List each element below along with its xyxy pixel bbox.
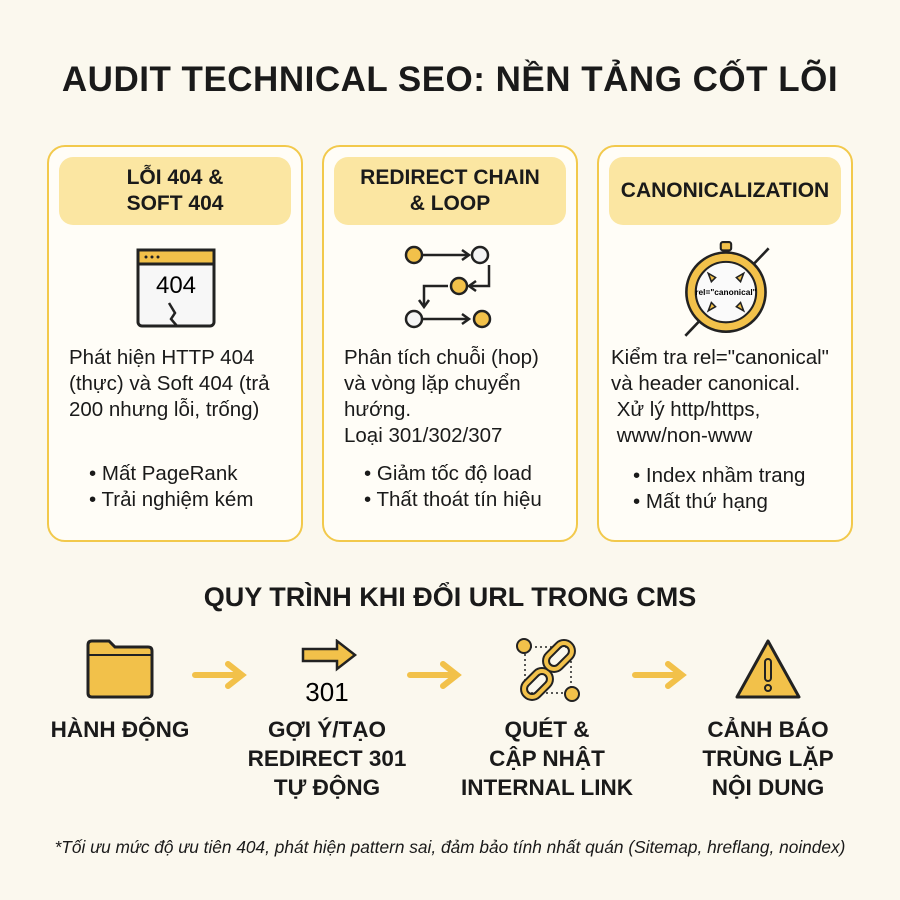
bullets: redirect (364, 462, 542, 511)
step: duplicate warning (702, 639, 834, 800)
footnote: *Tối ưu mức độ ưu tiên 404, phát hiện pattern sai, đảm bảo tính nhất quán (Sitemap, hreflang, noindex) (55, 837, 845, 857)
label: redirect 301: TỰ ĐỘNG (274, 775, 380, 800)
icon: canonical target: rel="canonical" (695, 287, 757, 297)
bullets: 404: • Mất PageRank (89, 462, 237, 485)
label: redirect 301 (248, 717, 406, 800)
heading: redirect (334, 157, 566, 225)
heading: 404 (59, 157, 291, 225)
bullets: canonical: • Index nhầm trang (633, 464, 805, 487)
bullets: 404 (89, 462, 253, 511)
heading: redirect: & LOOP (410, 192, 490, 215)
step: internal links (461, 638, 633, 800)
panel: redirect (322, 145, 578, 542)
text: canonical description: Kiểm tra rel="canonical" và header canonical. (611, 346, 829, 395)
icon: warning triangle (736, 639, 801, 698)
panel: 404 (47, 145, 303, 542)
label: redirect 301: REDIRECT 301 (248, 746, 406, 771)
heading: canonical: CANONICALIZATION (621, 179, 829, 202)
text: 404 description: Phát hiện HTTP 404 (thực) và Soft 404 (trả 200 nhưng lỗi, trống) (69, 346, 270, 421)
arrow 1 (192, 661, 247, 689)
section heading: QUY TRÌNH KHI ĐỔI URL TRONG CMS (204, 582, 696, 612)
bullets: canonical: • Mất thứ hạng (633, 490, 768, 513)
icon: folder (86, 640, 154, 698)
title: AUDIT TECHNICAL SEO: NỀN TẢNG CỐT LÕI (62, 60, 838, 99)
heading: 404: LỖI 404 & (127, 166, 223, 189)
text: redirect description: Phân tích chuỗi (hop) và vòng lặp chuyển hướng. (344, 346, 539, 421)
text: canonical description: www/non-www (617, 424, 752, 447)
heading: redirect: REDIRECT CHAIN (360, 166, 540, 189)
step: redirect 301 (248, 639, 406, 800)
bullets: 404: • Trải nghiệm kém (89, 488, 253, 511)
icon: canonical target (684, 241, 770, 337)
step: action (51, 640, 189, 742)
label: duplicate warning (702, 717, 834, 800)
icon: 301 arrow (302, 639, 357, 705)
icon: redirect chain (404, 246, 492, 328)
icon: 404 browser (136, 248, 216, 328)
bullets: canonical (633, 464, 805, 513)
label: action: HÀNH ĐỘNG (51, 717, 189, 742)
label: internal links: CẬP NHẬT (489, 746, 605, 771)
bullets: redirect: • Giảm tốc độ load (364, 462, 532, 485)
arrow 2 (407, 661, 462, 689)
text: canonical description (611, 346, 829, 447)
label: redirect 301: GỢI Ý/TẠO (268, 717, 386, 742)
icon: 404 browser: 404 (156, 272, 196, 299)
heading: canonical (609, 157, 841, 225)
bullets: redirect: • Thất thoát tín hiệu (364, 488, 542, 511)
heading: 404: SOFT 404 (127, 192, 223, 215)
label: duplicate warning: TRÙNG LẶP (702, 746, 834, 771)
label: internal links (461, 717, 633, 800)
icon: chain link (516, 638, 580, 702)
arrow 3 (632, 661, 687, 689)
panel: canonical (597, 145, 853, 542)
label: duplicate warning: CẢNH BÁO (707, 717, 829, 742)
text: redirect description: Loại 301/302/307 (344, 424, 502, 447)
label: internal links: QUÉT & (504, 717, 590, 742)
label: internal links: INTERNAL LINK (461, 775, 633, 800)
label: duplicate warning: NỘI DUNG (712, 775, 824, 800)
text: canonical description: Xử lý http/https, (617, 398, 760, 421)
